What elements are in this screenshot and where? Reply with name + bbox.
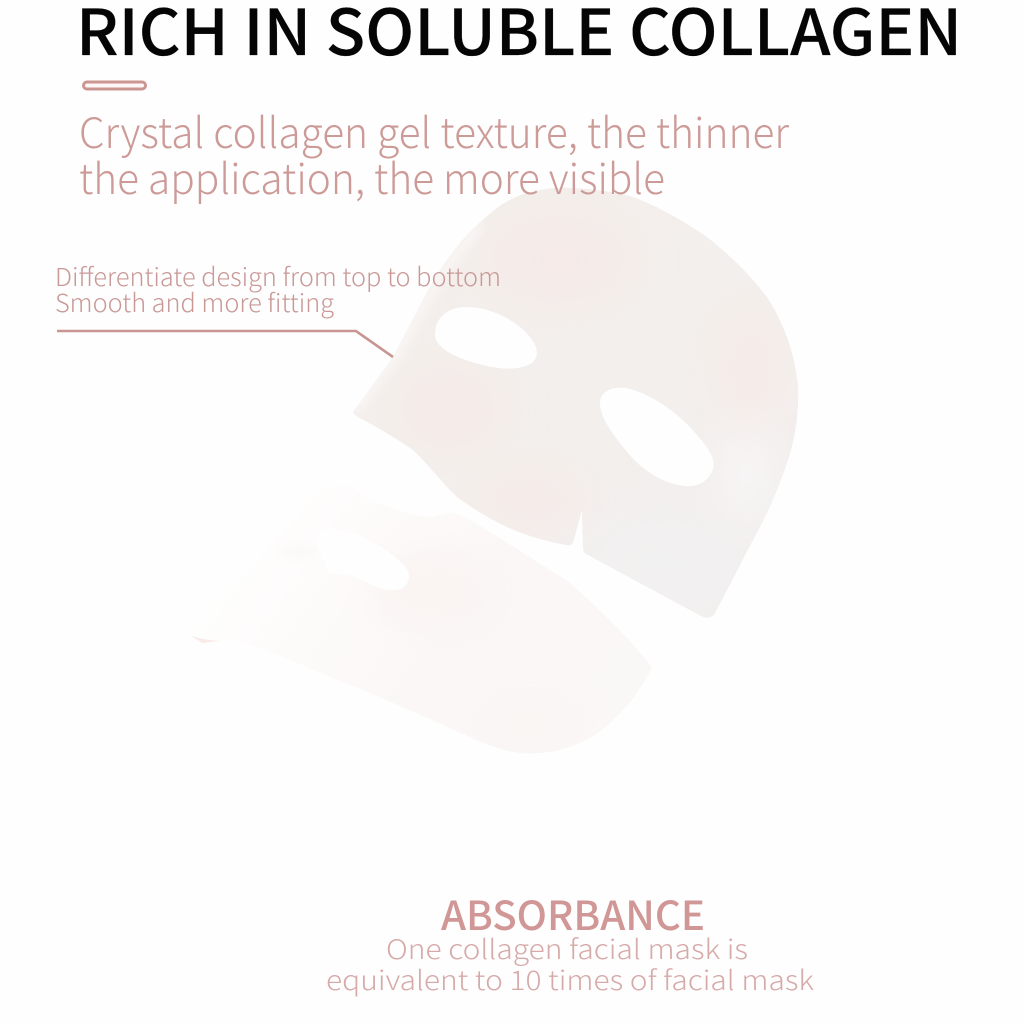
upper mask eye opening bbox=[435, 307, 537, 369]
absorbance heading: ABSORBANCE bbox=[441, 884, 705, 942]
decorative pill accent bbox=[84, 82, 146, 89]
lower face mask sheet bbox=[191, 540, 628, 753]
callout: design note: Differentiate design from top to bottom bbox=[55, 258, 501, 294]
absorbance description: equivalent to 10 times of facial mask bbox=[326, 959, 814, 998]
absorbance description: One collagen facial mask is bbox=[386, 928, 748, 967]
absorbance description bbox=[326, 928, 814, 998]
subtitle: Crystal collagen gel texture, the thinner bbox=[79, 100, 790, 161]
subtitle bbox=[79, 100, 790, 207]
lower mask eye opening bbox=[316, 529, 409, 590]
callout leader line bbox=[57, 331, 393, 357]
subtitle: the application, the more visible bbox=[79, 146, 665, 207]
callout: design note bbox=[55, 258, 501, 357]
upper face mask sheet bbox=[353, 188, 798, 618]
callout: design note: Smooth and more fitting bbox=[55, 284, 334, 320]
upper mask second eye opening bbox=[600, 388, 714, 486]
